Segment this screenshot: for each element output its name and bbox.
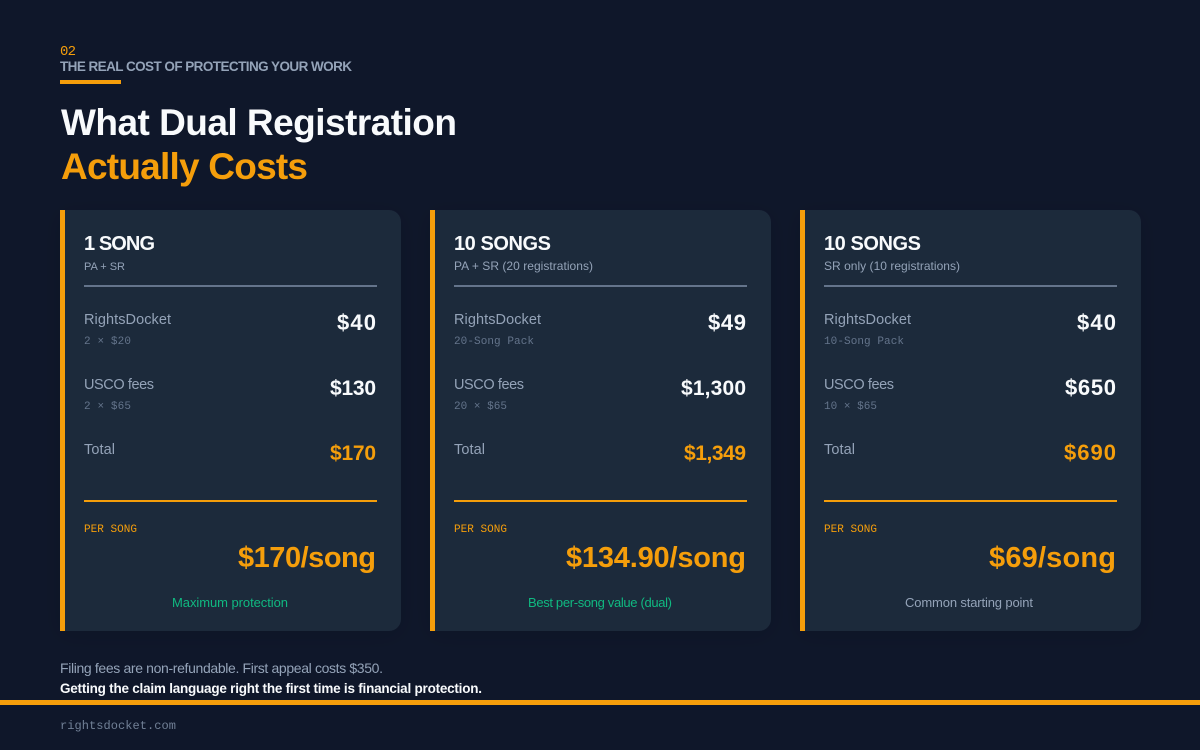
per song price: $134.90/song bbox=[566, 542, 746, 574]
footnote: Getting the claim language right the first time is financial protection. bbox=[60, 681, 482, 696]
total row: $1,349 bbox=[684, 442, 746, 465]
title bbox=[61, 102, 457, 187]
card heading: 1 SONG bbox=[84, 233, 155, 255]
RightsDocket row: $40 bbox=[337, 310, 376, 335]
per song price bbox=[824, 524, 1116, 574]
footer accent strip bbox=[0, 700, 1200, 705]
card subheading: SR only (10 registrations) bbox=[824, 259, 960, 273]
total row: $690 bbox=[1064, 440, 1116, 465]
card subheading: PA + SR (20 registrations) bbox=[454, 259, 593, 273]
per song price: PER SONG bbox=[84, 524, 137, 536]
RightsDocket row bbox=[84, 310, 376, 348]
total row bbox=[84, 442, 376, 465]
panel: 1 song bbox=[60, 210, 401, 631]
total row: Total bbox=[824, 442, 855, 458]
title: What Dual Registration bbox=[61, 102, 457, 143]
USCO fees row bbox=[84, 377, 376, 413]
title: Actually Costs bbox=[61, 146, 308, 187]
RightsDocket row: RightsDocket bbox=[454, 312, 541, 328]
total row: Total bbox=[454, 442, 485, 458]
card heading: 10 SONGS bbox=[824, 233, 921, 255]
card heading: 10 SONGS bbox=[454, 233, 551, 255]
USCO fees row: 10 × $65 bbox=[824, 401, 877, 413]
per song price: $170/song bbox=[238, 542, 376, 574]
USCO fees row: $130 bbox=[330, 377, 376, 400]
total row bbox=[454, 442, 746, 465]
per song price: $69/song bbox=[989, 542, 1116, 574]
footer url: rightsdocket.com bbox=[60, 719, 176, 733]
total row bbox=[824, 440, 1116, 465]
USCO fees row: 20 × $65 bbox=[454, 401, 507, 413]
RightsDocket row: RightsDocket bbox=[824, 312, 911, 328]
RightsDocket row: $40 bbox=[1077, 310, 1116, 335]
USCO fees row: $650 bbox=[1065, 375, 1116, 400]
USCO fees row bbox=[454, 377, 746, 413]
RightsDocket row: RightsDocket bbox=[84, 312, 171, 328]
USCO fees row: 2 × $65 bbox=[84, 401, 131, 413]
per song price: PER SONG bbox=[824, 524, 877, 536]
RightsDocket row: 10-Song Pack bbox=[824, 336, 904, 348]
footnote bbox=[60, 660, 482, 696]
RightsDocket row: 2 × $20 bbox=[84, 336, 131, 348]
card subheading: PA + SR bbox=[84, 261, 125, 273]
RightsDocket row bbox=[824, 310, 1116, 348]
card note: Common starting point bbox=[905, 595, 1033, 610]
per song price bbox=[454, 524, 746, 574]
RightsDocket row: 20-Song Pack bbox=[454, 336, 534, 348]
USCO fees row: USCO fees bbox=[454, 377, 524, 393]
RightsDocket row: $49 bbox=[708, 310, 746, 335]
total row: Total bbox=[84, 442, 115, 458]
USCO fees row: USCO fees bbox=[824, 377, 894, 393]
eyebrow heading: THE REAL COST OF PROTECTING YOUR WORK bbox=[60, 59, 352, 74]
per song price: PER SONG bbox=[454, 524, 507, 536]
per song price bbox=[84, 524, 376, 574]
section number: 02 bbox=[60, 44, 76, 60]
panel: 10 songs dual bbox=[430, 210, 771, 631]
card note: Best per-song value (dual) bbox=[528, 595, 672, 610]
RightsDocket row bbox=[454, 310, 746, 348]
footnote: Filing fees are non-refundable. First appeal costs $350. bbox=[60, 660, 383, 676]
card note: Maximum protection bbox=[172, 595, 288, 610]
accent bar bbox=[60, 80, 121, 84]
USCO fees row bbox=[824, 375, 1116, 413]
USCO fees row: $1,300 bbox=[681, 377, 746, 400]
total row: $170 bbox=[330, 442, 376, 465]
USCO fees row: USCO fees bbox=[84, 377, 154, 393]
panel: 10 songs SR only bbox=[800, 210, 1141, 631]
